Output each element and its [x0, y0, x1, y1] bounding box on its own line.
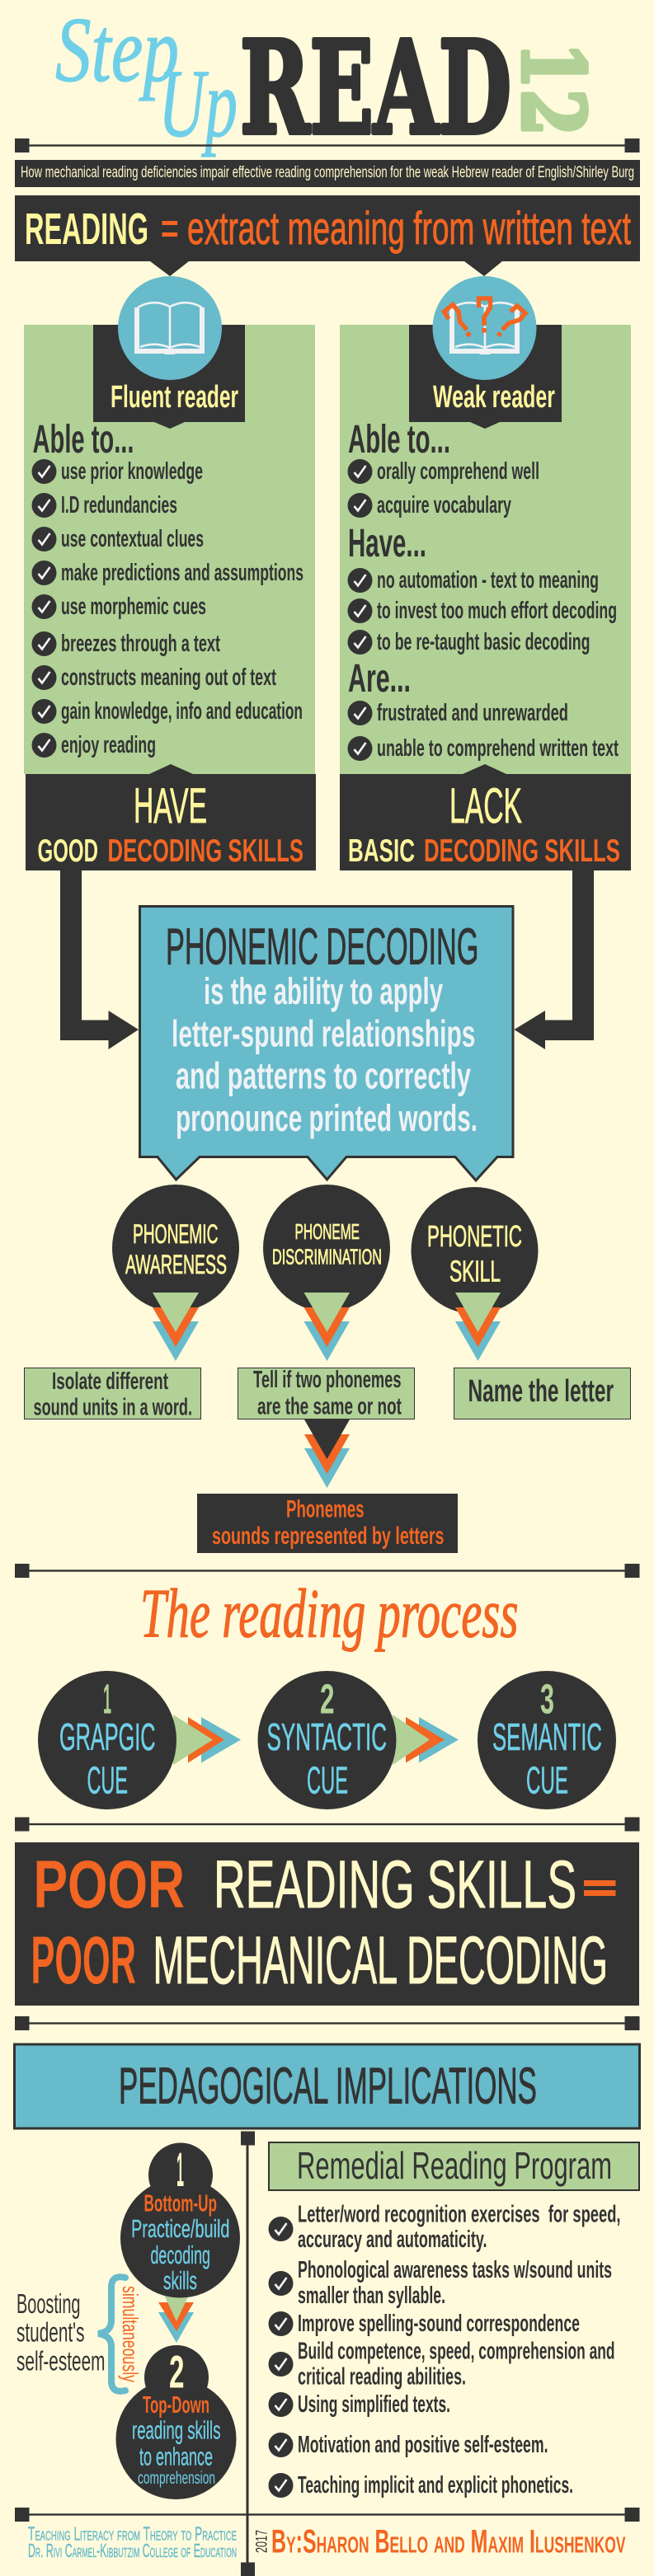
bottom rule — [15, 2508, 640, 2522]
node 1: bottom-up — [120, 2143, 240, 2298]
box: isolate different sound units — [25, 1368, 201, 1421]
checklist: weak feelings — [348, 700, 619, 762]
box: isolate different sound units: sound units in a word. — [33, 1395, 192, 1421]
footer: course credit: Teaching Literacy from Theory to Practice — [28, 2522, 237, 2544]
box: isolate different sound units: Isolate different — [52, 1368, 168, 1395]
cue 3: semantic: 3 — [540, 1675, 554, 1723]
label: AWARENESS — [125, 1250, 227, 1279]
box: tell if two phonemes: are the same or not — [257, 1393, 402, 1419]
footer: course credit: Dr. Rivi Carmel-Kibbutzim College of Education — [28, 2540, 237, 2561]
text: boosting self-esteem: Boosting — [16, 2288, 81, 2319]
cue 3: semantic: CUE — [526, 1759, 568, 1802]
line 1 — [33, 1847, 576, 1922]
definition text: is the ability to apply — [204, 970, 443, 1012]
checklist: remedial program: Using simplified texts. — [298, 2391, 450, 2418]
panel: phonemic decoding — [140, 907, 513, 1180]
checklist: fluent abilities: constructs meaning out of text — [61, 664, 276, 691]
checklist: weak abilities — [348, 458, 539, 518]
text: boosting self-esteem: student's — [16, 2316, 84, 2348]
title word: Step: Step — [55, 0, 179, 101]
heading: able to: Able to... — [348, 418, 450, 462]
text: boosting self-esteem — [16, 2288, 106, 2376]
subtitle bar — [15, 160, 640, 187]
definition banner: reading — [15, 195, 640, 276]
checklist: fluent abilities: gain knowledge, info and education — [61, 698, 303, 725]
banner: lack basic decoding skills — [340, 764, 631, 870]
checklist: remedial program: smaller than syllable. — [298, 2283, 445, 2309]
label: PHONEMIC — [133, 1219, 218, 1249]
arrow stack — [455, 1293, 501, 1361]
node 1: bottom-up: 1 — [176, 2143, 184, 2197]
text: boosting self-esteem: self-esteem — [16, 2346, 106, 2376]
definition text: and patterns to correctly — [176, 1055, 471, 1096]
checklist: fluent abilities: I.D redundancies — [61, 492, 177, 518]
tab: weak reader — [409, 325, 562, 429]
cue 2: syntactic: CUE — [307, 1759, 348, 1802]
panel: weak reader — [340, 276, 631, 774]
description: comprehension — [138, 2469, 215, 2488]
node: phonetic skill — [411, 1187, 538, 1361]
footer: year: 2017 — [254, 2530, 271, 2553]
node: phonemic awareness — [112, 1185, 239, 1361]
title: Step Up READ 12 — [55, 0, 604, 163]
arrow stack to phonemes — [304, 1419, 350, 1488]
checklist: remedial program — [269, 2201, 620, 2499]
checklist: weak haves — [348, 567, 617, 655]
tab: fluent reader — [93, 325, 245, 429]
arrow: weak to phonemic decoding — [515, 870, 594, 1049]
word READING: READING — [25, 204, 148, 254]
checklist: remedial program: accuracy and automaticity. — [298, 2226, 487, 2253]
definition text: letter-spund relationships — [172, 1012, 475, 1055]
description: reading skills — [132, 2415, 221, 2445]
description: decoding — [150, 2241, 210, 2269]
box: phonemes — [197, 1494, 458, 1553]
cue 2: syntactic: 2 — [320, 1675, 335, 1723]
line 2: POOR — [31, 1923, 136, 1998]
arrow: fluent to phonemic decoding — [60, 870, 139, 1049]
label: PHONEME — [295, 1219, 360, 1244]
description: skills — [163, 2266, 197, 2295]
description — [132, 2415, 221, 2488]
title word: Up: Up — [158, 49, 238, 157]
checklist: fluent abilities: use morphemic cues — [61, 594, 206, 620]
cue 3: semantic — [478, 1671, 616, 1809]
words decoding skills: DECODING SKILLS — [107, 833, 303, 869]
word HAVE: HAVE — [134, 778, 207, 833]
cue 1: graphic: 1 — [103, 1675, 111, 1723]
box: phonemes: sounds represented by letters — [212, 1523, 444, 1550]
arrow stack — [303, 1293, 350, 1361]
cue 2: syntactic — [257, 1671, 396, 1809]
label: fluent reader: Fluent reader — [111, 380, 238, 415]
equals sign — [584, 1880, 615, 1896]
heading: Bottom-Up — [144, 2191, 217, 2217]
cue 2: syntactic: SYNTACTIC — [267, 1715, 387, 1758]
box: name the letter — [454, 1368, 630, 1419]
word LACK: LACK — [449, 778, 522, 833]
cue 1: graphic: CUE — [87, 1759, 128, 1802]
footer: course credit — [28, 2522, 237, 2561]
definition text — [172, 970, 478, 1139]
label: weak reader: Weak reader — [433, 380, 555, 415]
line 1: POOR — [33, 1847, 185, 1922]
box: tell if two phonemes — [238, 1367, 414, 1419]
banner: have good decoding skills — [26, 764, 316, 870]
cue 1: graphic: GRAPGIC — [59, 1715, 155, 1758]
label — [427, 1219, 522, 1288]
word GOOD: GOOD — [38, 833, 98, 869]
heading: have: Have... — [348, 522, 426, 565]
label: DISCRIMINATION — [272, 1245, 382, 1269]
heading: are: Are... — [348, 657, 411, 701]
checklist: fluent abilities: use contextual clues — [61, 526, 204, 552]
flow arrows between cues — [173, 1715, 459, 1765]
label: SKILL — [449, 1255, 501, 1288]
icon: book with question marks — [432, 276, 536, 380]
checklist: fluent abilities: enjoy reading — [61, 732, 156, 758]
label: PHONETIC — [427, 1219, 522, 1253]
panel: fluent reader — [24, 276, 315, 774]
checklist: fluent abilities: make predictions and assumptions — [61, 560, 303, 586]
brace — [98, 2277, 125, 2391]
banner: poor reading skills — [15, 1842, 639, 2006]
checklist: fluent abilities — [31, 458, 303, 758]
arrow stack — [153, 1293, 199, 1361]
text: simultaneously: simultaneously — [118, 2286, 143, 2382]
checklist: fluent abilities: breezes through a text — [61, 631, 220, 657]
checklist: remedial program: critical reading abilities. — [298, 2364, 466, 2391]
definition text: pronounce printed words. — [176, 1097, 478, 1139]
banner: pedagogical implications — [15, 2044, 640, 2128]
numeral 2: 2 — [169, 2346, 185, 2397]
checklist: weak abilities: acquire vocabulary — [377, 492, 511, 518]
label — [125, 1219, 227, 1279]
title word: READ: READ — [240, 12, 511, 163]
arrow stack: bottom-up to top-down — [158, 2292, 194, 2343]
node 2: top-down — [115, 2345, 236, 2499]
cue 1: graphic — [38, 1671, 176, 1809]
heading: Top-Down — [143, 2392, 209, 2419]
box: tell if two phonemes: Tell if two phonemes — [253, 1367, 401, 1393]
icon: open book — [118, 276, 222, 380]
node: phoneme discrimination — [263, 1185, 390, 1361]
vertical divider — [241, 2132, 255, 2576]
checklist: fluent abilities: use prior knowledge — [61, 458, 203, 485]
checklist: weak abilities: orally comprehend well — [377, 458, 539, 485]
word BASIC: BASIC — [348, 833, 415, 869]
heading: able to: Able to... — [33, 418, 134, 462]
description: to enhance — [139, 2442, 213, 2471]
label — [272, 1219, 382, 1269]
title word: rotated 12: 12 — [502, 42, 604, 136]
description — [131, 2214, 229, 2295]
description: Practice/build — [131, 2214, 229, 2243]
box: phonemes: Phonemes — [286, 1495, 365, 1523]
